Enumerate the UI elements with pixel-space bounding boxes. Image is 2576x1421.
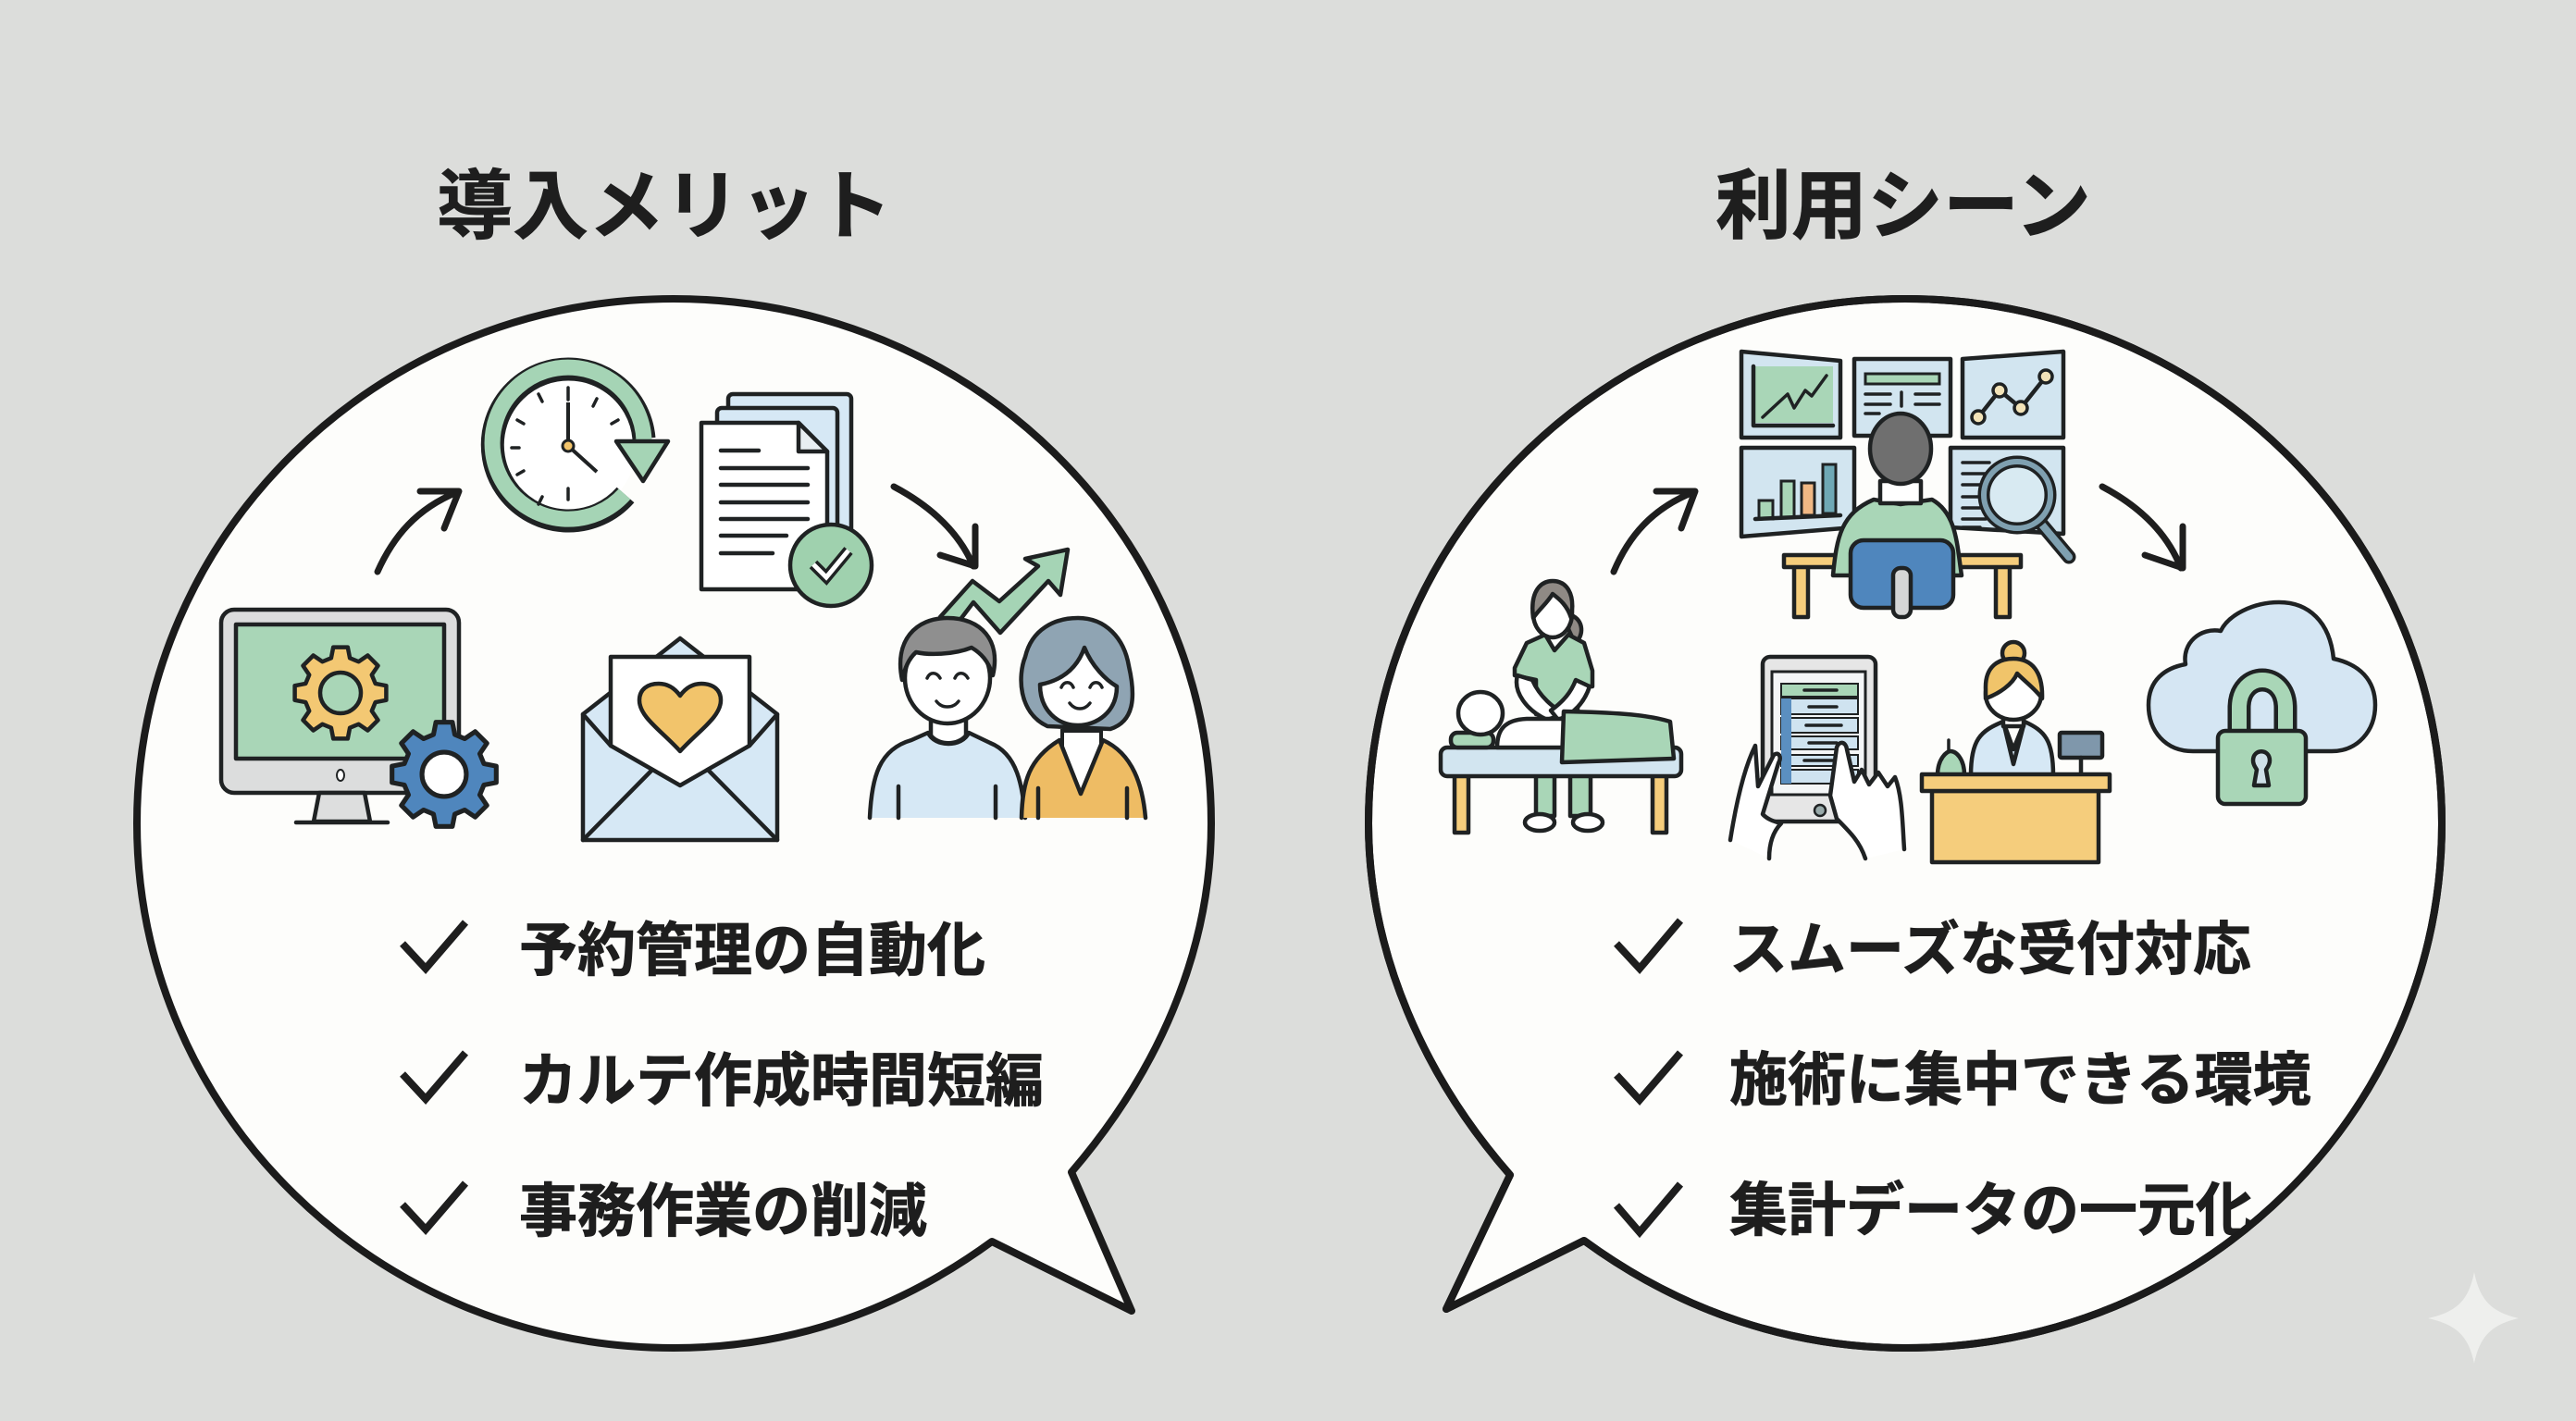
icon: cloud with padlock [2149, 602, 2375, 804]
figure: woman [1022, 618, 1146, 818]
patient [1451, 692, 1674, 762]
treatment table [1441, 748, 1681, 833]
desk [1784, 555, 2021, 617]
icon: tablet held by hands [1730, 657, 1904, 859]
chair [1851, 540, 1953, 617]
monitor: list and magnifier [1951, 448, 2063, 534]
icon: heart [639, 684, 721, 751]
receptionist [1971, 642, 2053, 775]
icon: documents with check badge [701, 394, 872, 606]
check item 1: 予約管理の自動化 [519, 919, 985, 983]
panel: benefits speech bubble [137, 299, 1211, 1348]
check item 1: スムーズな受付対応 [1729, 918, 2251, 982]
icon: clock with circular arrow [492, 367, 668, 521]
counter monitor [2060, 733, 2102, 775]
icon: monitor with gears [221, 610, 496, 826]
check item 3: 集計データの一元化 [1729, 1179, 2254, 1243]
arrow: therapist to dashboards [1614, 491, 1695, 572]
monitor: report [1854, 359, 1951, 436]
checklist: benefits [402, 919, 1044, 1244]
icon: padlock [2218, 680, 2306, 804]
heading: usage scenes: 利用シーン [1715, 165, 2091, 249]
icon: green check badge [790, 525, 872, 606]
icon: magnifier [1984, 462, 2069, 557]
icon: blue gear [392, 723, 496, 826]
icon: receptionist at desk [1922, 642, 2110, 862]
icon: envelope with heart letter [583, 638, 777, 840]
check item 2: 施術に集中できる環境 [1729, 1048, 2311, 1113]
check item 2: カルテ作成時間短編 [519, 1049, 1044, 1114]
monitor: dot chart [1963, 352, 2063, 438]
icon: therapist treating patient [1441, 581, 1681, 833]
person seen from behind [1833, 414, 1962, 575]
right hand [1830, 743, 1904, 859]
heading: benefits: 導入メリット [437, 165, 892, 249]
bubble outline over clipped text [1368, 299, 2442, 1348]
monitor: bar chart [1741, 448, 1854, 537]
icon: yellow gear [295, 648, 386, 738]
monitor: line chart [1741, 352, 1840, 438]
checklist: usage scenes [1616, 918, 2311, 1243]
therapist torso and head [1515, 581, 1592, 720]
arrow: monitor to clock [378, 491, 459, 572]
panel: usage scenes speech bubble [1368, 299, 2442, 1348]
left hand [1730, 746, 1781, 859]
check item 3: 事務作業の削減 [519, 1180, 927, 1244]
reception desk [1922, 774, 2110, 862]
service bell [1938, 740, 1964, 775]
arrow: documents to people [894, 487, 975, 566]
arrow: dashboards to cloud [2102, 487, 2183, 568]
figure: man [870, 618, 1025, 818]
icon: growth arrow [940, 550, 1068, 633]
therapist legs [1525, 768, 1603, 831]
icon: sparkle watermark [2428, 1272, 2519, 1364]
icon: man and woman smiling [870, 618, 1146, 818]
icon: person at multi-monitor desk [1741, 352, 2069, 617]
